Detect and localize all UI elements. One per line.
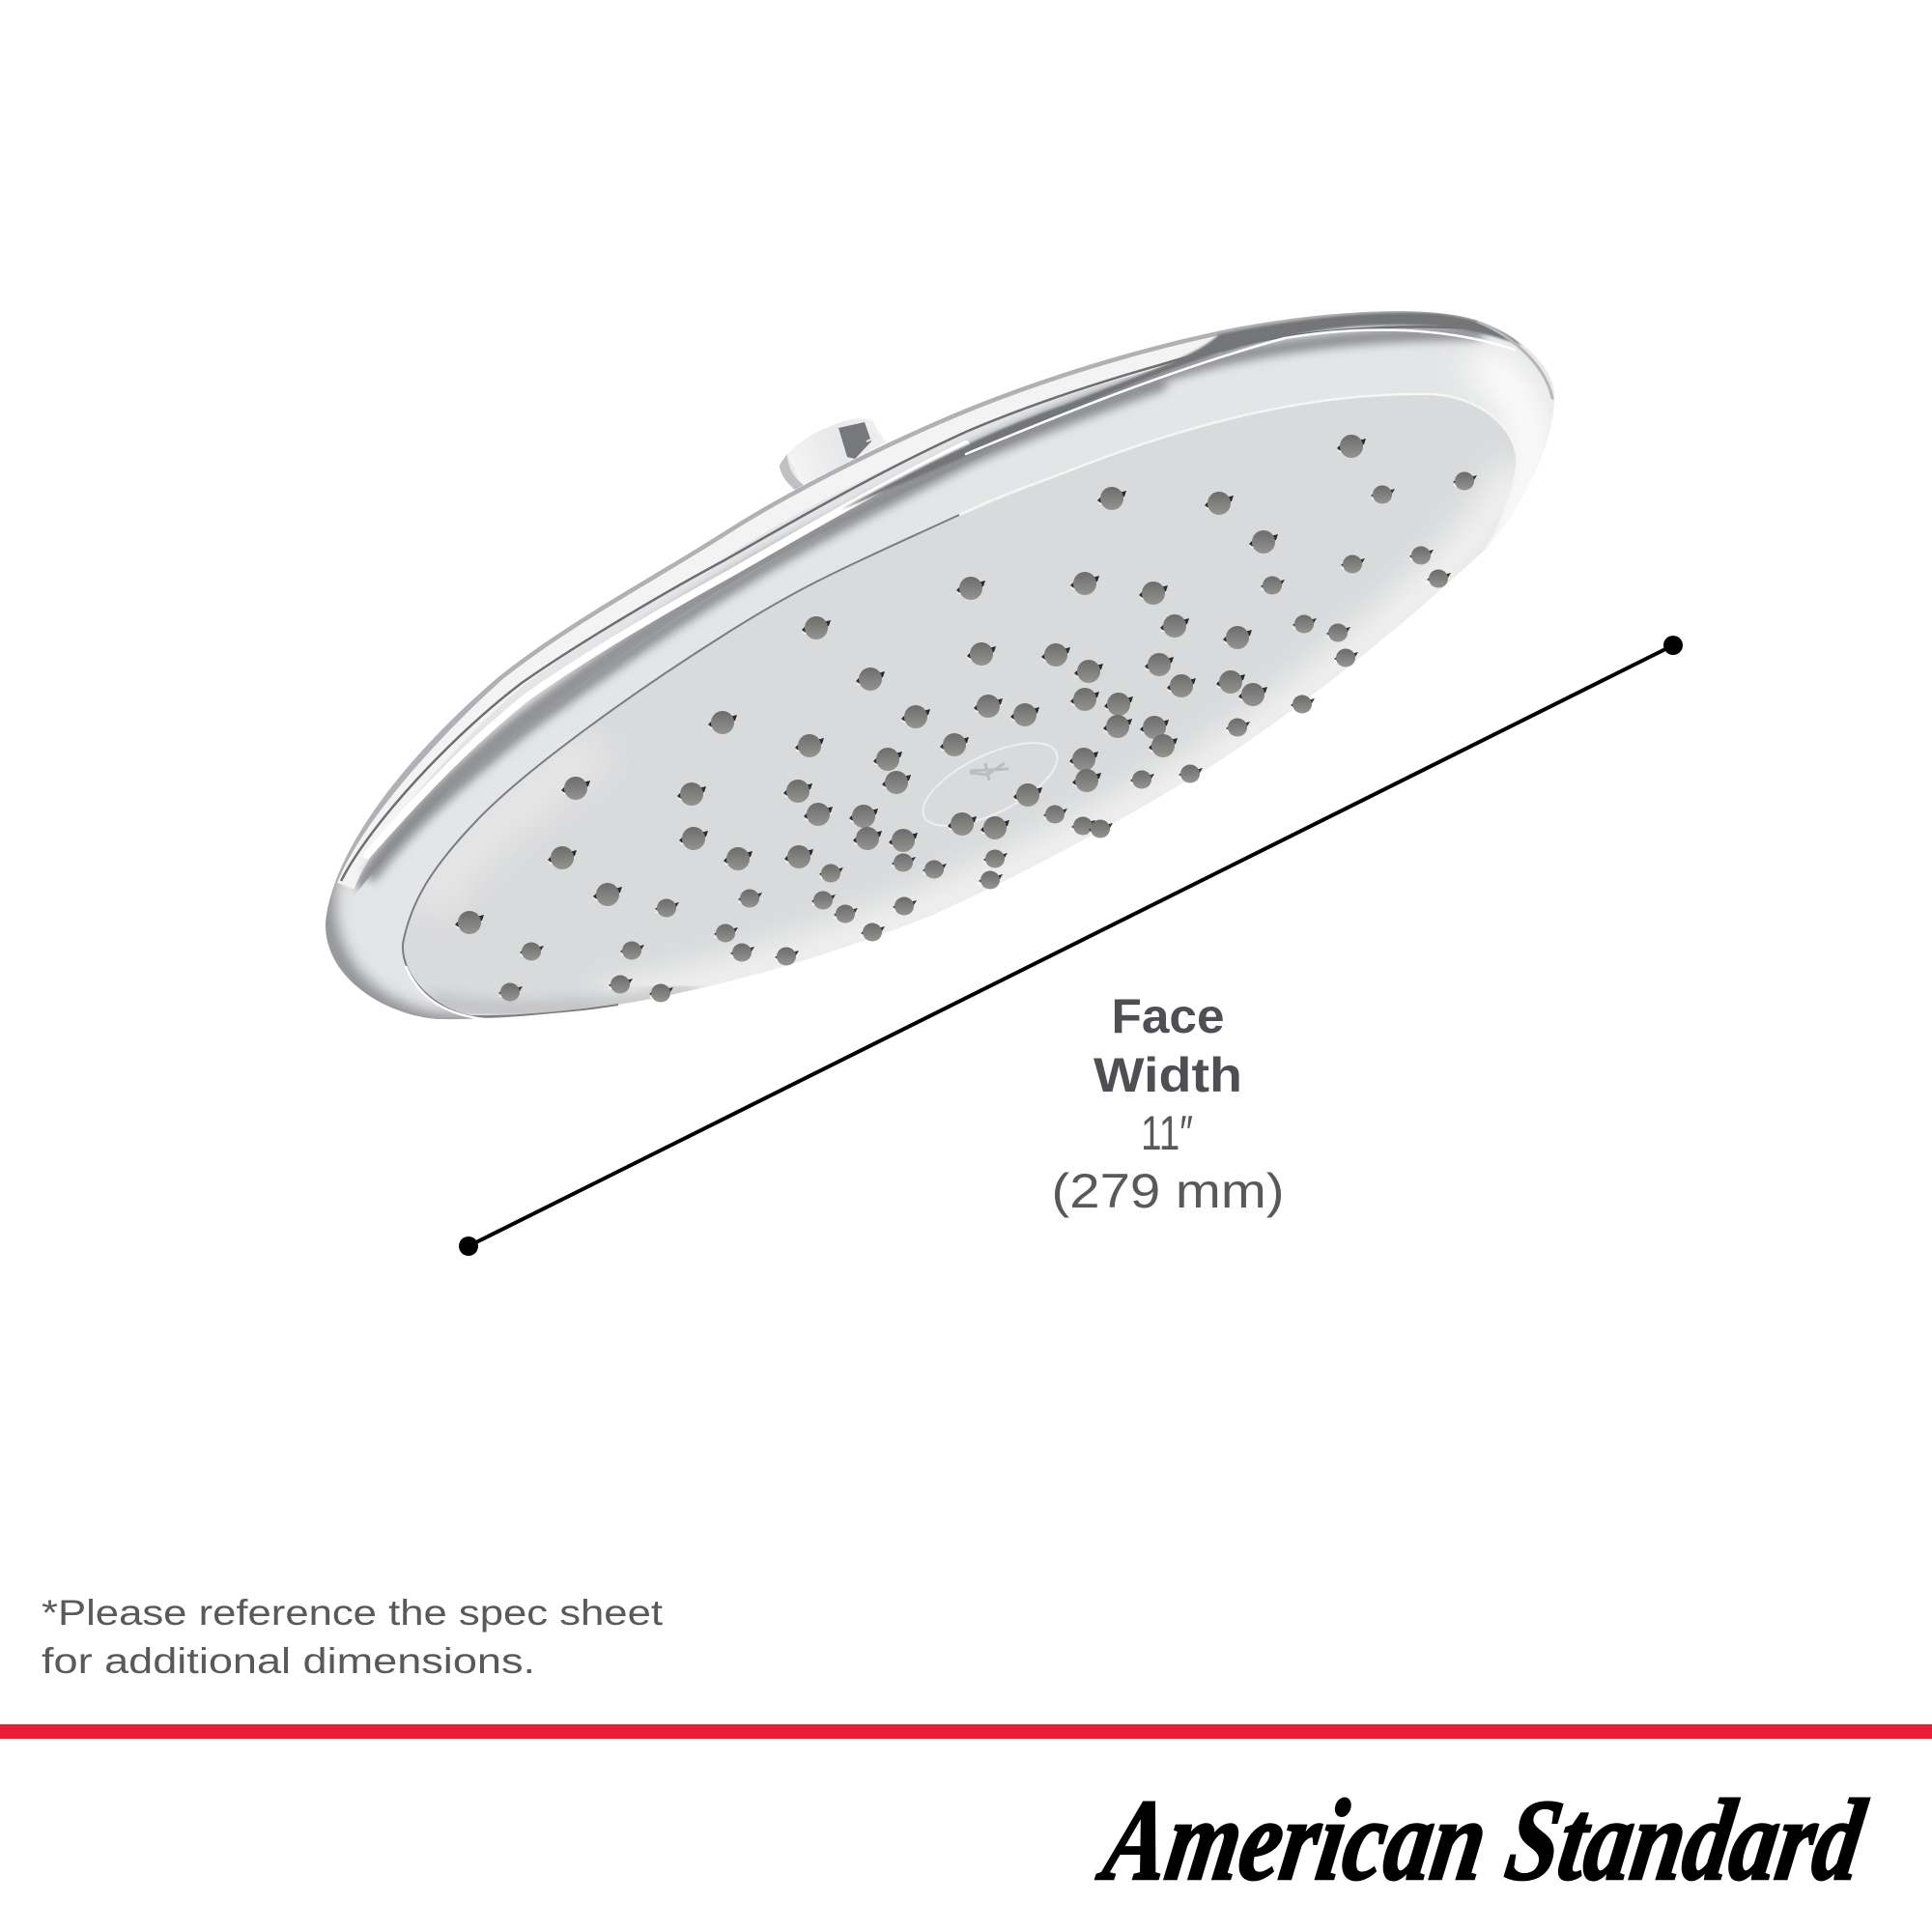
face ring line (403, 515, 959, 1016)
icon: shower head product (325, 311, 1554, 1024)
footnote: *Please reference the spec sheet (42, 1593, 664, 1633)
dimension label: face width: 11″ (1141, 1106, 1193, 1160)
shower head rim (325, 311, 1554, 1024)
footnote: for additional dimensions. (42, 1641, 535, 1681)
shower arm connector (780, 418, 886, 490)
dimension label: face width: Width (1094, 1048, 1242, 1102)
footnote (42, 1593, 664, 1681)
dimension label: face width (1051, 989, 1285, 1218)
dimension label: face width: Face (1111, 989, 1225, 1043)
spray face (403, 394, 1517, 1020)
dimension line: face width (459, 636, 1683, 1256)
dimension label: face width: (279 mm) (1051, 1164, 1285, 1218)
red divider bar (0, 1724, 1932, 1739)
spray nozzles (455, 435, 1477, 1003)
center logo badge (912, 726, 1068, 842)
